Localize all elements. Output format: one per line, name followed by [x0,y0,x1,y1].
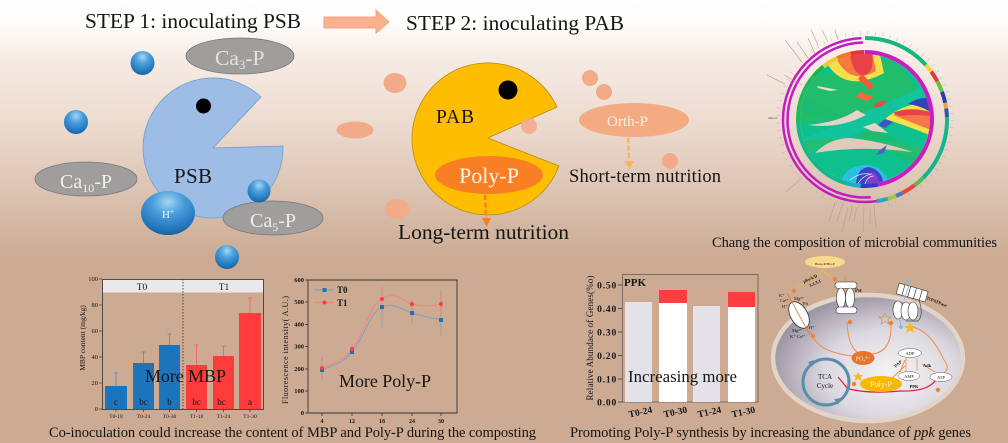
gene labels: 3.1.3.1 [808,278,822,288]
bottom colour lens [842,165,888,184]
chart: PPK gene abundance bar chart: T0-30 [663,406,688,420]
Pit transporter: Mg²⁺ [792,328,803,333]
Poly-P node [860,376,902,392]
letters: b [167,397,172,407]
caption: ppk genes: Promoting Poly-P synthesis by increasing the abundance of ppk genes [570,425,971,441]
chart: Poly-P fluorescence line chart: 24 [409,419,415,425]
tick labels: 0.20 [597,352,617,362]
chart: PPK gene abundance bar chart: PPK [624,277,646,289]
letters: bc [217,397,226,407]
chord body [800,54,930,184]
tick labels: 0 [301,410,304,417]
ADP AMP ATP nodes [893,348,952,389]
icon: proton spheres [64,51,270,269]
ADP AMP ATP nodes: PPK [910,384,919,389]
arrow: Orth-P to short-term nutrition [625,138,634,169]
Pit transporter: Mg²⁺ [794,296,805,301]
label: Orth-P [579,103,689,137]
axis tick labels: 0 [95,406,98,413]
label: Ca5-P: -P [278,210,296,232]
ADP AMP ATP nodes: AMP [904,374,914,379]
ADP AMP ATP nodes: ADP [905,351,915,356]
chart: Poly-P fluorescence line chart: 18 [379,419,385,425]
Pit transporter: Pit [803,301,809,306]
label: Ca10-P: -P [94,171,112,193]
chart: MBP content bar chart: T0-18 [109,414,123,420]
chart: Poly-P fluorescence line chart: 30 [438,419,444,425]
PO4 node: PO₄³⁻ [856,356,870,362]
tick labels: 200 [294,366,304,373]
radial ticks [778,33,952,207]
legend: T1 [337,298,348,308]
ATPase transporter: TrPATPase [926,295,948,308]
Pit transporter: H⁺ [782,304,788,309]
panel: PAB bacterium: Poly-P [459,163,519,188]
panel: PSB bacterium: PSB [174,164,212,188]
source ellipse: Bone-P/Bio-P [815,262,835,266]
label: Ca3-P: Ca [215,46,239,70]
panel: PAB bacterium [412,63,559,215]
icon: H+ sphere: H [162,209,170,221]
chart: MBP content bar chart [78,276,264,420]
ADP AMP ATP nodes: Adk [923,363,932,368]
panel: PAB bacterium: PAB [436,107,474,128]
axis tick labels [88,276,98,413]
Pit transporter [779,293,815,339]
Pit transporter: Ca²⁺ [780,298,789,303]
gene labels: phoA/D [802,273,819,284]
chart: PPK gene abundance bar chart: T0-24 [628,406,653,420]
icon: H+ sphere: + [170,208,174,216]
axis tick labels: 20 [92,380,98,387]
chart: MBP content bar chart: T1 [219,283,230,293]
label: Orth-P: Orth-P [607,114,648,130]
chart: MBP content bar chart: T1-30 [243,414,257,420]
chart: MBP content bar chart: More MBP [145,366,226,386]
error bars [322,287,441,380]
PO4 node [852,351,874,365]
chart: PPK gene abundance bar chart: T1-30 [731,406,756,420]
chart: MBP content bar chart: MBP content (mg/kg) [78,305,87,371]
T1 line [322,296,441,368]
chart: MBP content bar chart: T1-24 [217,414,230,420]
phosphate dots [792,277,940,392]
chart: MBP content bar chart: T0 [137,283,148,293]
long label lines [767,30,876,232]
chart: Poly-P fluorescence line chart: Fluorescence intensity( A.U.) [281,296,290,404]
TCA cycle [803,359,849,405]
icon: H+ sphere [141,191,195,235]
chart: PPK gene abundance bar chart: Increasing more [628,367,737,386]
tick labels: 0.30 [597,328,617,338]
bars T1 [186,313,261,409]
TCA cycle: TCA [818,373,832,381]
TCA cycle: Cycle [817,382,833,390]
stars [853,313,916,381]
gaps [808,110,866,126]
tick labels: 400 [294,322,304,328]
label: Ca3-P: 3 [239,57,245,72]
chart: PPK gene abundance bar chart: Relative Abundace of Genes(%o) [585,276,595,400]
red pathways [838,377,937,392]
legend [314,285,348,308]
tick labels [597,282,617,408]
cell body [773,295,963,421]
bars [625,302,652,402]
outer ring segments [783,38,947,202]
chart: MBP content bar chart: T0-30 [163,414,176,420]
letters [114,397,252,407]
ATPase transporter [893,279,948,329]
tick labels: 0.50 [597,282,617,292]
inner ring [798,52,932,186]
legend: T0 [337,285,348,295]
axis tick labels: 40 [92,354,98,361]
axis tick labels: 80 [92,302,98,309]
error bars [114,298,252,386]
tick labels: 300 [294,344,304,350]
tick labels: 100 [294,388,304,395]
chart: MBP content bar chart: T0-24 [137,414,150,420]
tick labels: 0.40 [597,305,617,315]
top colour lens [826,55,884,81]
heading: step 2: STEP 2: inoculating PAB [406,11,624,35]
axis tick labels: 60 [92,328,98,335]
Pst transporter: Pst [855,289,862,294]
letters: a [248,397,252,407]
bars T0 [105,345,180,409]
chart: Poly-P fluorescence line chart: More Poly-P [339,371,431,391]
frame and axis [102,280,264,410]
label: Ca5-P: Ca [250,210,272,232]
label: Ca3-P [186,38,294,74]
tick labels: 600 [294,277,304,284]
label: Ca5-P [223,201,323,235]
arrow: step 1 to step 2 [324,10,389,33]
label: Ca10-P [35,162,137,196]
letters: bc [139,397,148,407]
chart: Poly-P fluorescence line chart: 12 [349,419,355,425]
heading: step 1: STEP 1: inoculating PSB [85,9,301,33]
tick labels: 0.00 [597,398,617,408]
Pit transporter: K⁺ Ca²⁺ [790,334,806,339]
gene labels [802,273,822,288]
letters: c [114,397,118,407]
source ellipse [805,256,845,268]
text: long-term nutrition: Long-term nutrition [398,220,569,244]
Pit transporter: K⁺ [779,293,785,298]
label: Ca3-P: -P [245,46,265,70]
caption: MBP and Poly-P: Co-inoculation could increase the content of MBP and Poly-P during the composting [49,425,536,441]
text: short-term nutrition: Short-term nutrition [569,167,721,187]
chart: MBP content bar chart: T1-18 [190,414,203,420]
Pit transporter: H⁺ [809,325,815,330]
T0 line [322,305,441,370]
chart: PPK gene abundance bar chart: T1-24 [697,406,722,420]
tick labels: 0.10 [597,376,617,386]
axis tick labels: 100 [88,276,98,283]
arrow: Poly-P to long-term nutrition [482,195,491,227]
chart: PPK gene abundance bar chart [585,274,758,420]
Poly-P node: Poly-P [870,380,892,389]
Pst transporter [835,282,862,314]
caption: microbial communities: Chang the composition of microbial communities [712,235,997,251]
markers [320,305,443,372]
ADP AMP ATP nodes: ATP [937,375,945,380]
tick labels [294,277,304,417]
icon: orange phosphate particles [336,70,678,219]
ADP AMP ATP nodes: PAP [893,359,903,368]
orange pathways [787,277,947,380]
chart: Poly-P fluorescence line chart [281,277,457,425]
label: Ca10-P: 10 [82,181,94,195]
diagram: cell Poly-P synthesis pathway [773,256,963,421]
letters: bc [192,397,201,407]
label: Ca5-P: 5 [272,220,278,234]
panel: PSB bacterium [143,78,283,218]
tiny label: Others [768,116,778,120]
chart: Poly-P fluorescence line chart: 4 [320,419,324,425]
tick labels: 500 [294,299,304,306]
chart: microbial community chord diagram [767,30,952,232]
label: Ca10-P: Ca [60,171,82,193]
right colour lens [885,102,932,136]
